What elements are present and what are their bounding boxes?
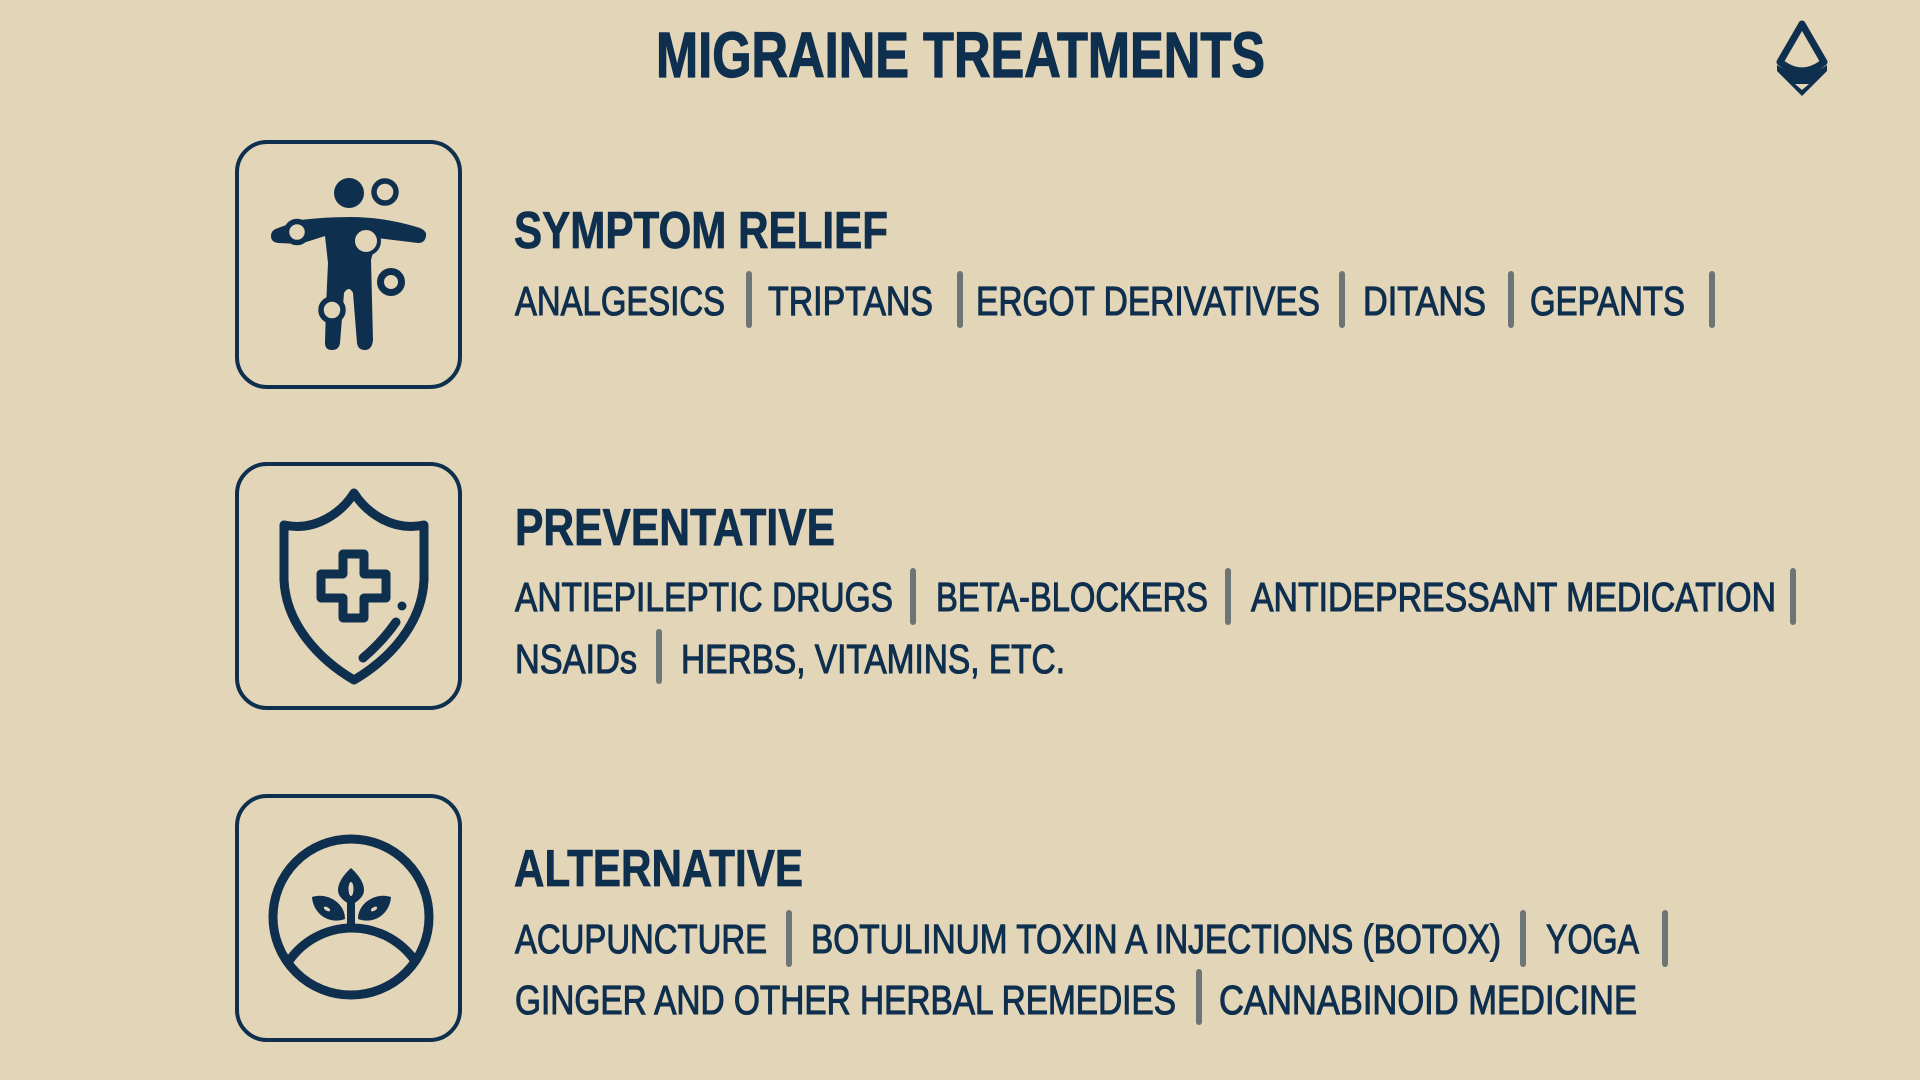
- list items: TRIPTANS: [768, 278, 933, 324]
- list items: [515, 568, 1796, 684]
- list items: [515, 271, 1715, 328]
- list items: BOTULINUM TOXIN A INJECTIONS (BOTOX): [811, 916, 1501, 962]
- list items: BETA-BLOCKERS: [936, 574, 1208, 620]
- list items: ERGOT DERIVATIVES: [976, 278, 1320, 324]
- list items: CANNABINOID MEDICINE: [1219, 977, 1637, 1023]
- panel: preventative: [237, 464, 1796, 708]
- heading: ALTERNATIVE: [514, 840, 803, 898]
- list items: NSAIDs: [515, 636, 637, 682]
- icon: logo drop: [1777, 24, 1827, 96]
- heading: PREVENTATIVE: [515, 499, 835, 557]
- list items: GINGER AND OTHER HERBAL REMEDIES: [515, 977, 1176, 1023]
- list items: ANTIDEPRESSANT MEDICATION: [1251, 574, 1776, 620]
- list items: ACUPUNCTURE: [515, 916, 767, 962]
- list items: YOGA: [1546, 916, 1640, 962]
- heading: SYMPTOM RELIEF: [514, 202, 888, 260]
- panel: symptom relief: [237, 142, 1715, 387]
- list items: GEPANTS: [1530, 278, 1685, 324]
- icon: body with pain points: [237, 142, 460, 387]
- list items: HERBS, VITAMINS, ETC.: [681, 636, 1065, 682]
- list items: ANALGESICS: [515, 278, 725, 324]
- list items: DITANS: [1363, 278, 1486, 324]
- icon: shield with cross: [237, 464, 460, 708]
- list items: ANTIEPILEPTIC DRUGS: [515, 574, 893, 620]
- panel: alternative: [237, 796, 1668, 1040]
- icon: plant in circle: [237, 796, 460, 1040]
- list items: [515, 910, 1668, 1025]
- title: MIGRAINE TREATMENTS: [656, 19, 1265, 91]
